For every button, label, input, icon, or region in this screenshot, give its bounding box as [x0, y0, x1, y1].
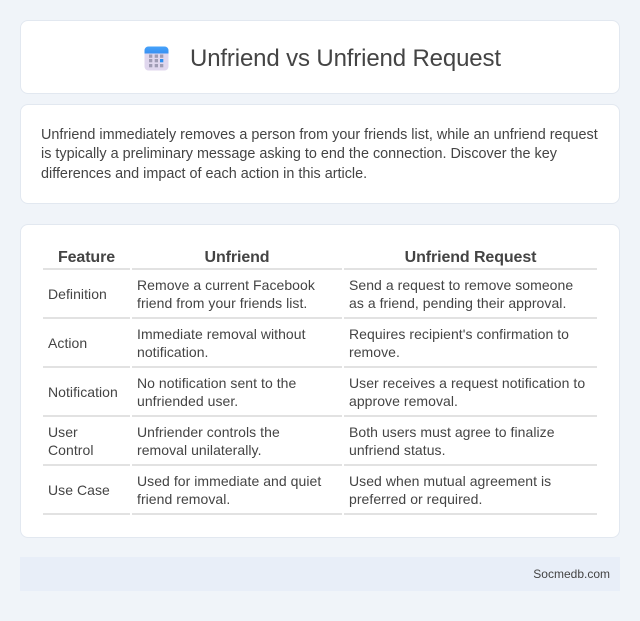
row: user control: Unfriender controls the: [137, 424, 280, 440]
panel: comparison table: [20, 224, 620, 538]
table header: Unfriend Request: [405, 249, 536, 266]
row: use case: Used when mutual agreement is: [349, 473, 551, 489]
table header: Unfriend: [204, 249, 269, 266]
row: use case: friend removal.: [137, 491, 230, 507]
row: use case: Used for immediate and quiet: [137, 473, 321, 489]
row: use case: preferred or required.: [349, 491, 482, 507]
row: notification: No notification sent to the: [137, 375, 296, 391]
row: use case: Use Case: [48, 482, 110, 498]
table header: Feature: [58, 249, 115, 266]
row: action: Requires recipient's confirmation to: [349, 326, 569, 342]
row: user control: [43, 424, 597, 466]
table header: [43, 249, 597, 270]
panel: introduction: [20, 104, 620, 204]
row: definition: Definition: [48, 286, 107, 302]
row: notification: unfriended user.: [137, 393, 238, 409]
row: notification: Notification: [48, 384, 118, 400]
row: action: remove.: [349, 344, 400, 360]
title: Unfriend vs Unfriend Request: [190, 45, 501, 72]
row: user control: unfriend status.: [349, 442, 446, 458]
row: notification: User receives a request notification to: [349, 375, 585, 391]
row: use case: [43, 473, 597, 515]
row: definition: friend from your friends list.: [137, 295, 307, 311]
footer bar: [20, 557, 620, 591]
text block: introduction: is typically a preliminary message asking to end the connection. Discover the key: [41, 146, 557, 162]
row: notification: [43, 375, 597, 417]
row: action: Action: [48, 335, 87, 351]
icon: calendar: [144, 46, 168, 70]
row: user control: Control: [48, 442, 93, 458]
row: user control: Both users must agree to finalize: [349, 424, 555, 440]
row: user control: User: [48, 424, 78, 440]
text block: introduction: Unfriend immediately removes a person from your friends list, while an unfriend request: [41, 126, 598, 142]
footer text: Socmedb.com: [533, 567, 610, 581]
row: user control: removal unilaterally.: [137, 442, 262, 458]
row: action: Immediate removal without: [137, 326, 306, 342]
row: action: [43, 326, 597, 368]
text block: introduction: [41, 126, 598, 182]
panel: title card: [20, 20, 620, 94]
row: definition: [43, 277, 597, 319]
row: definition: Remove a current Facebook: [137, 277, 315, 293]
row: definition: Send a request to remove someone: [349, 277, 573, 293]
row: action: notification.: [137, 344, 208, 360]
text block: introduction: differences and impact of each action in this article.: [41, 166, 367, 182]
row: definition: as a friend, pending their approval.: [349, 295, 566, 311]
row: notification: approve removal.: [349, 393, 458, 409]
